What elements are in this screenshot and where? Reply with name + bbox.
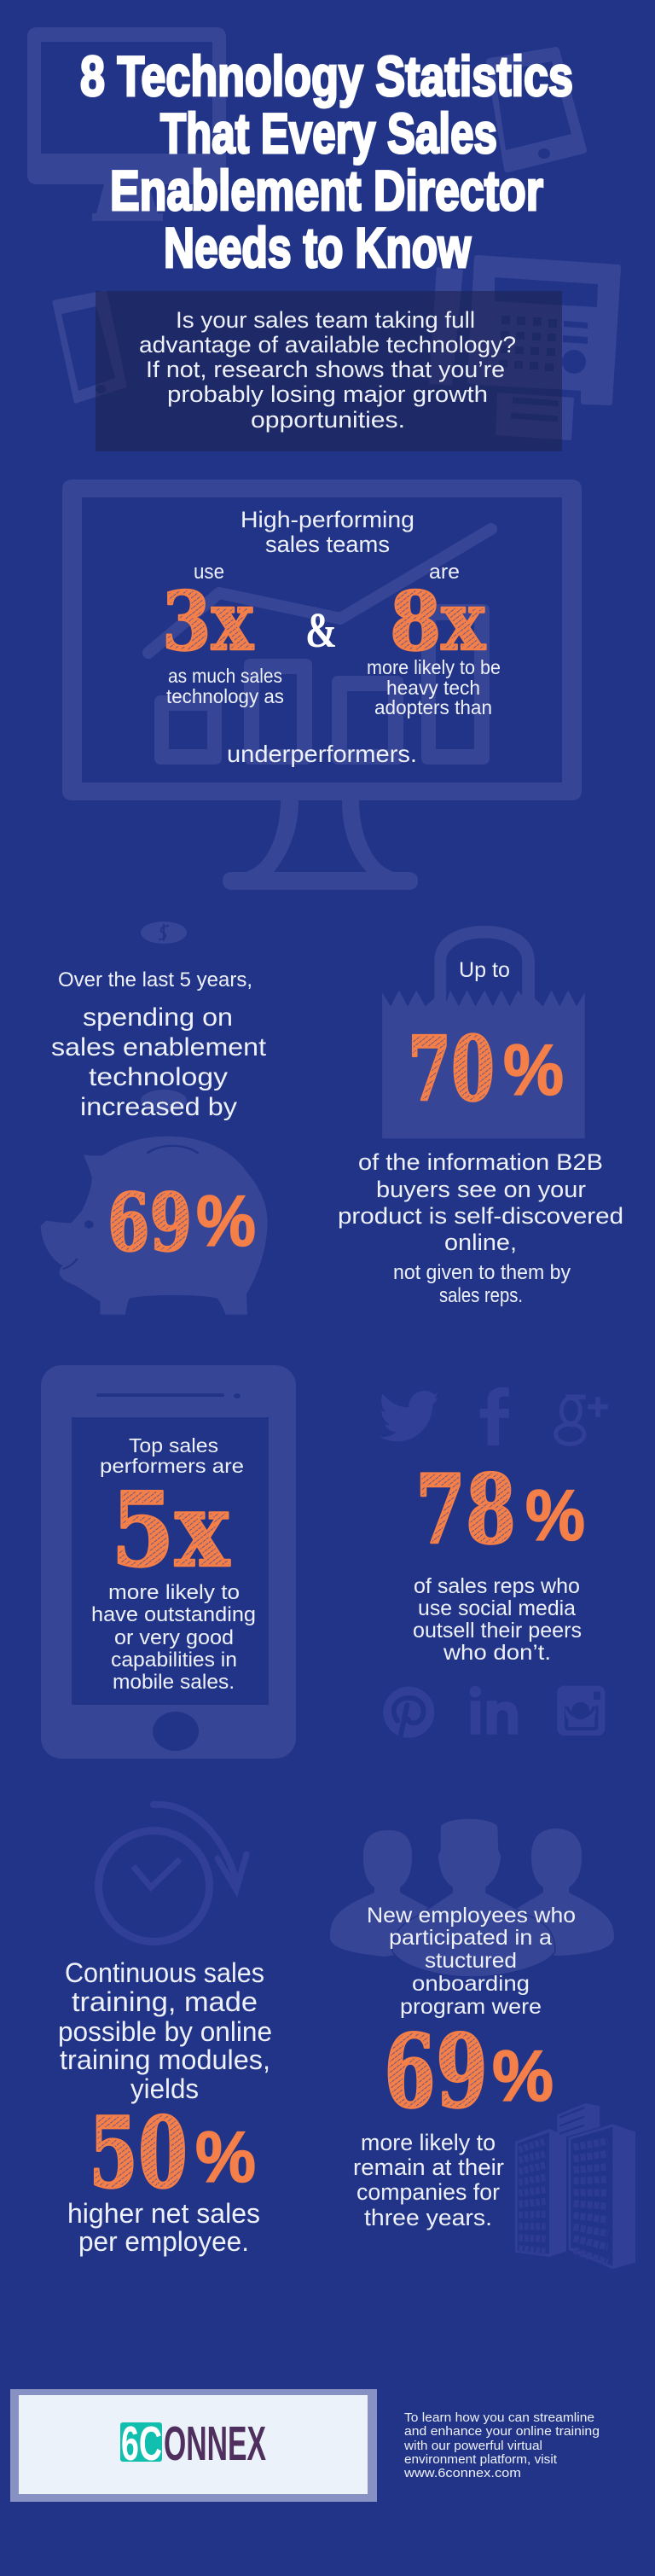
stat: 5x: 5x — [111, 1470, 230, 1590]
intro text: opportunities. — [251, 407, 405, 433]
text: spending on sales enablement: spending on — [83, 1003, 233, 1032]
heading: high-performing sales teams — [241, 507, 414, 557]
text: information B2B buyers: sales reps. — [439, 1284, 523, 1307]
text: spending on sales enablement: sales enablement — [51, 1033, 267, 1061]
stat: 78%: % — [525, 1475, 585, 1555]
panel: logo box — [10, 2389, 377, 2502]
text: mobile sales capabilities — [91, 1581, 256, 1694]
text: higher net sales — [67, 2198, 260, 2257]
icon: instagram — [557, 1686, 605, 1736]
text: mobile sales capabilities: or very good — [114, 1626, 234, 1649]
stat: 3x: as much sales — [168, 665, 282, 687]
text: remain at companies — [353, 2130, 504, 2230]
intro text: advantage of available technology? — [139, 332, 516, 358]
stat: 69%: 69 — [384, 2012, 488, 2131]
text: mobile sales capabilities: capabilities in — [111, 1649, 237, 1672]
logo: 6Connex: 6C — [121, 2416, 162, 2471]
text: sales reps outsell: outsell their peers — [413, 1619, 582, 1643]
stat: 69%: % — [196, 1181, 256, 1261]
text: new employees — [367, 1904, 576, 2019]
text: spending on sales enablement — [51, 968, 267, 1121]
logo: 6Connex — [120, 2416, 266, 2471]
panel: high performers monitor — [62, 480, 582, 890]
stat: 3x: use — [194, 561, 224, 584]
text: information B2B buyers: of the information B2B — [358, 1149, 603, 1175]
panel: social media stat — [380, 1387, 608, 1738]
icon: twitter — [380, 1391, 438, 1441]
intro text — [139, 307, 516, 433]
text: mobile sales capabilities: mobile sales. — [113, 1671, 235, 1694]
intro text: If not, research shows that you’re — [146, 357, 505, 382]
ampersand: & — [305, 602, 337, 658]
stat: 8x — [367, 561, 501, 718]
text: top sales performers — [100, 1434, 244, 1477]
icon: desktop monitor background — [27, 27, 226, 221]
text: new employees: New employees who — [367, 1904, 576, 1928]
title — [80, 44, 573, 279]
panel: mobile sales phone — [41, 1365, 296, 1759]
text: remain at companies: three years. — [364, 2205, 492, 2230]
intro text: Is your sales team taking full — [176, 307, 475, 333]
text: mobile sales capabilities: more likely to — [108, 1581, 240, 1604]
text: top sales performers: Top sales — [129, 1434, 218, 1457]
text: new employees: program were — [400, 1995, 542, 2019]
stat: 70%: 70 — [408, 1016, 495, 1121]
icon: google plus — [556, 1397, 608, 1444]
stat: 3x — [162, 561, 284, 707]
footer call to action text: with our powerful virtual — [403, 2439, 542, 2453]
text: information B2B buyers: online, — [444, 1230, 517, 1255]
icon: piggy bank — [41, 1137, 268, 1315]
text: continuous sales training: yields — [130, 2073, 199, 2104]
text: continuous sales training: possible by online — [58, 2016, 272, 2047]
footer call to action text: To learn how you can streamline — [404, 2410, 594, 2425]
text: spending on sales enablement: increased by — [80, 1093, 237, 1121]
stat: 50%: 50 — [89, 2096, 188, 2210]
text: continuous sales training: training modules, — [60, 2044, 270, 2075]
text: sales reps outsell: use social media — [418, 1596, 576, 1620]
text: information B2B buyers: not given to them by — [393, 1261, 571, 1284]
text: mobile sales capabilities: have outstanding — [91, 1603, 256, 1626]
icon: tablet background top right — [490, 50, 583, 169]
text: continuous sales training: Continuous sales — [65, 1957, 264, 1988]
footer call to action text: www.6connex.com — [403, 2466, 521, 2480]
icon: pinterest — [383, 1687, 434, 1738]
text: remain at companies: companies for — [356, 2179, 500, 2205]
stat: 8x: more likely to be — [367, 656, 501, 678]
text: up to: Up to — [459, 958, 510, 982]
text: underperformers: underperformers. — [227, 741, 417, 767]
text: information B2B buyers: buyers see on your — [376, 1177, 586, 1202]
footer call to action text: and enhance your online training — [404, 2424, 600, 2439]
text: higher net sales: higher net sales — [67, 2198, 260, 2229]
icon: large monitor with chart — [62, 480, 582, 890]
title: Enablement Director — [110, 159, 543, 222]
stat: 8x: are — [429, 561, 460, 584]
panel: self-discovered information with bag — [338, 926, 623, 1307]
stat: 8x: heavy tech — [386, 677, 480, 699]
text: new employees: onboarding — [412, 1972, 530, 1996]
text: sales reps outsell: who don’t. — [443, 1641, 551, 1665]
text: information B2B buyers: product is self-discovered — [338, 1203, 623, 1229]
stat: 69%: 69 — [107, 1176, 192, 1269]
icon: shopping bag — [382, 926, 585, 1138]
panel: continuous training — [58, 1805, 272, 2257]
footer call to action text — [403, 2410, 600, 2480]
text: higher net sales: per employee. — [78, 2226, 249, 2257]
footer call to action text: environment platform, visit — [404, 2452, 558, 2467]
text: top sales performers: performers are — [100, 1455, 244, 1477]
icon: facebook — [480, 1387, 509, 1445]
heading: high-performing sales teams: sales teams — [265, 532, 390, 557]
text: continuous sales training — [58, 1957, 272, 2104]
icon: linkedin — [470, 1686, 518, 1735]
stat: 50%: % — [195, 2117, 256, 2197]
text: sales reps outsell: of sales reps who — [414, 1574, 580, 1598]
icon: calculator background — [429, 258, 618, 440]
icon: coins — [141, 922, 187, 1112]
stat: 3x: technology as — [166, 685, 284, 707]
stat: 69%: % — [492, 2036, 554, 2116]
stat: 78%: 78 — [415, 1455, 516, 1566]
icon: clock with arrow — [99, 1805, 246, 1942]
panel: spending stat with piggy bank — [41, 922, 268, 1315]
stat: 3x: 3x — [162, 574, 254, 669]
icon: smartphone — [41, 1365, 296, 1759]
intro text: probably losing major growth — [167, 381, 488, 407]
icon: three people — [330, 1818, 614, 1977]
text: continuous sales training: training, made — [72, 1986, 258, 2017]
text: sales reps outsell — [413, 1574, 582, 1665]
title: That Every Sales — [160, 102, 497, 165]
icon: small tablet background left — [55, 293, 125, 401]
logo: 6Connex: ONNEX — [164, 2416, 266, 2471]
panel: intro box — [96, 291, 562, 451]
text: new employees: participated in a — [389, 1926, 552, 1950]
title: Needs to Know — [164, 216, 471, 279]
text: remain at companies: more likely to — [361, 2130, 496, 2155]
text: spending on sales enablement: Over the last 5 years, — [58, 968, 252, 991]
heading: high-performing sales teams: High-performing — [241, 507, 414, 532]
stat: 70%: % — [503, 1030, 564, 1110]
text: information B2B buyers — [338, 1149, 623, 1307]
icon: office buildings — [515, 2103, 635, 2269]
stat: 8x: 8x — [390, 574, 486, 669]
text: new employees: stuctured — [425, 1949, 517, 1973]
stat: 8x: adopters than — [374, 696, 492, 718]
text: spending on sales enablement: technology — [89, 1063, 228, 1091]
text: remain at companies: remain at their — [353, 2154, 504, 2180]
panel: onboarding — [330, 1818, 635, 2269]
